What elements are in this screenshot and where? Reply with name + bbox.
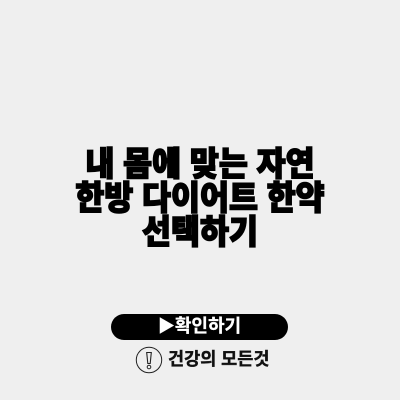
title: 한방 다이어트 한약: [75, 179, 325, 217]
brand text: 건강의 모든것: [168, 349, 269, 369]
icon: exclamation circle: [136, 346, 162, 374]
title: 선택하기: [142, 213, 258, 251]
button: 확인하기: [111, 314, 288, 340]
title: [75, 145, 325, 251]
title: 내 몸에 맞는 자연: [85, 145, 315, 183]
button: 확인하기: ▶확인하기: [158, 316, 241, 336]
